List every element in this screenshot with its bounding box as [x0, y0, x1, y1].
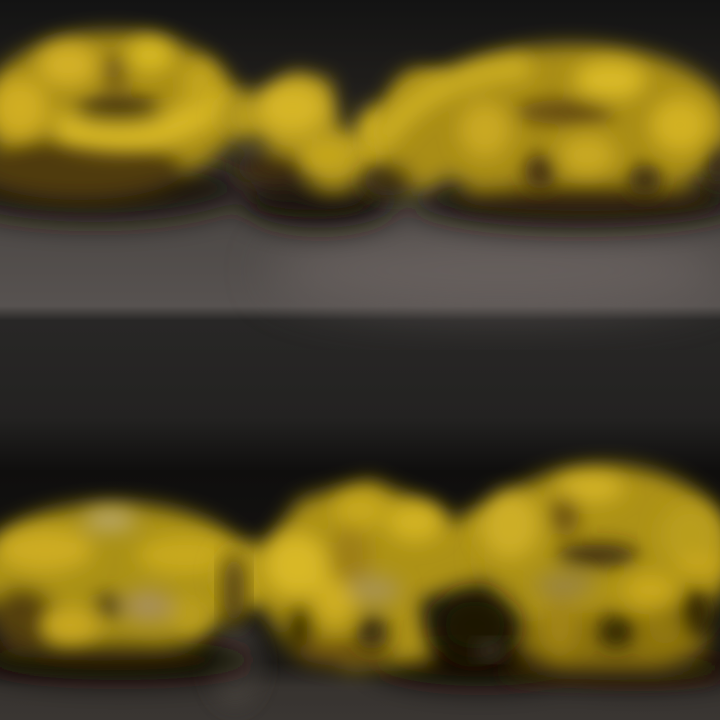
coil tube and markings [385, 60, 720, 196]
snake shadow [0, 634, 720, 686]
coil base [363, 45, 720, 211]
coil base [0, 503, 255, 660]
coil highlights [264, 492, 443, 650]
bottom snake [0, 465, 720, 686]
middle bend [219, 70, 450, 210]
dark gaps between coils [223, 554, 515, 659]
pale patch in the gap [477, 642, 503, 658]
coil markings [480, 474, 720, 653]
dark gap under middle and right coils [435, 591, 515, 659]
coil base [216, 480, 516, 670]
left coil [0, 32, 240, 200]
bend highlights [258, 82, 400, 169]
coil bands and markings [0, 509, 233, 641]
coil base [0, 32, 240, 200]
right coil [363, 45, 720, 211]
coil tube and markings [0, 37, 218, 138]
right coil [477, 465, 720, 680]
left coil [0, 503, 255, 660]
dark stripe between left and middle coils [223, 554, 245, 626]
middle coil [216, 480, 516, 670]
top snake [0, 32, 720, 228]
bend base [219, 70, 450, 210]
coil base [477, 465, 720, 680]
snake shadow [0, 154, 720, 228]
